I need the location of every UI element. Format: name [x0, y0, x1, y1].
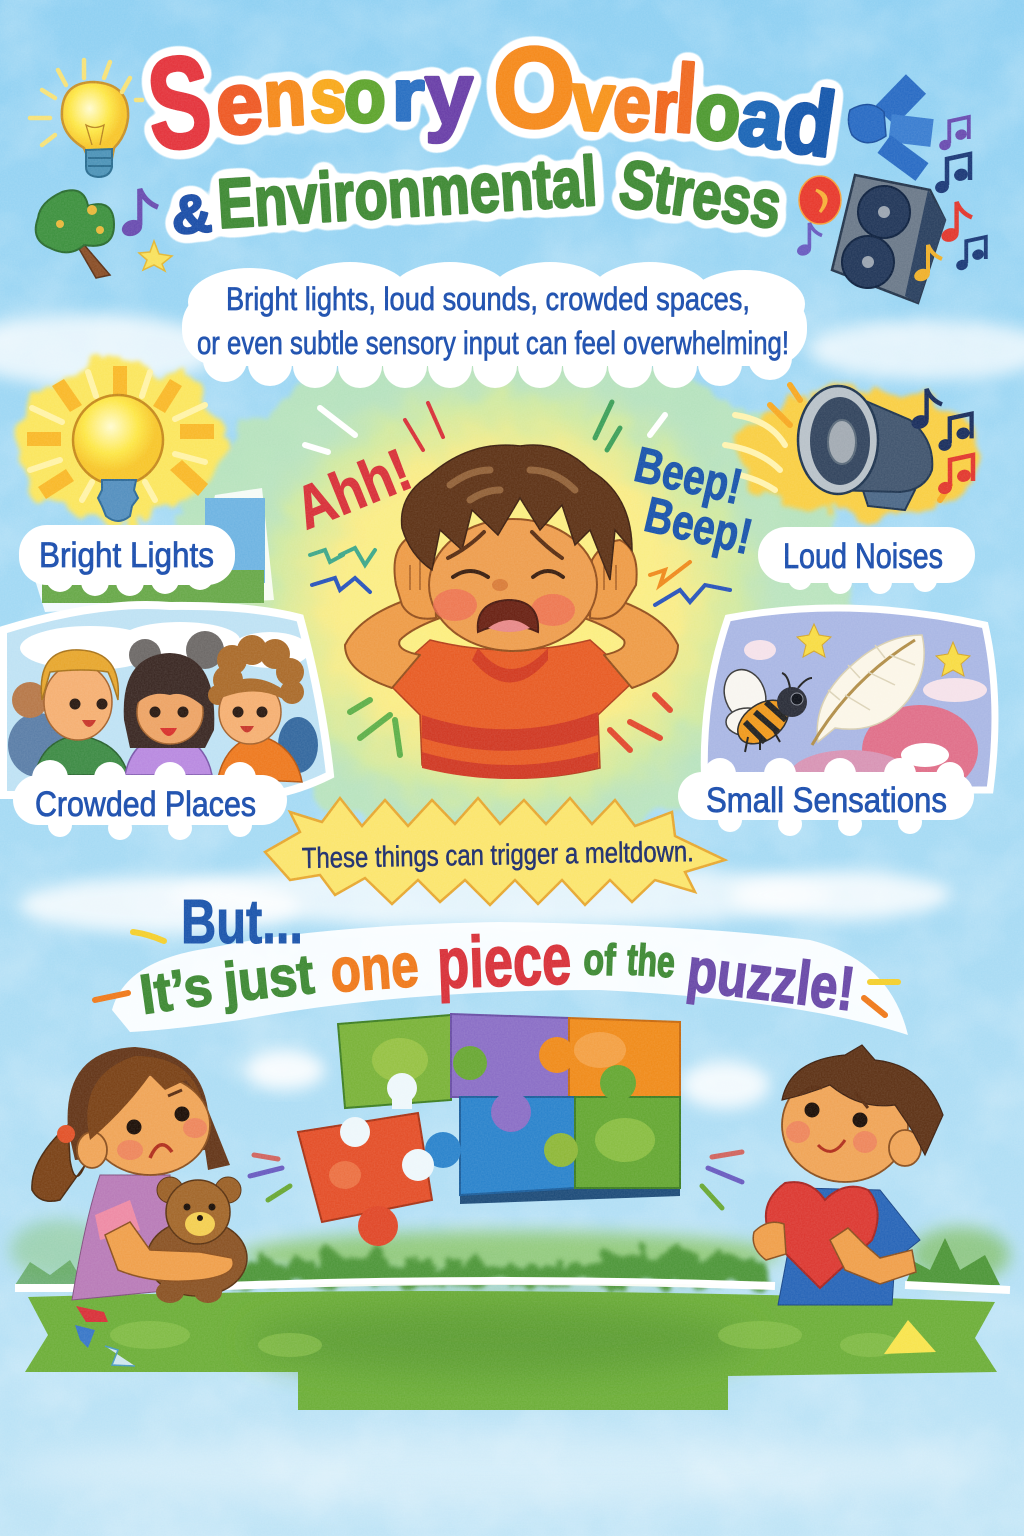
- white ribbon: [112, 922, 908, 1035]
- label: Small Sensations: [706, 781, 947, 820]
- heading: one piece of the puzzle: of: [583, 935, 617, 985]
- stars: [797, 624, 831, 657]
- megaphone speaker: [798, 386, 932, 510]
- title line 1: Sensory Overload: O: [493, 24, 575, 152]
- title line 1: Sensory Overload: o: [691, 63, 746, 159]
- hair highlights: [450, 470, 575, 500]
- title line 1: Sensory Overload: e: [611, 58, 654, 149]
- label: Bright Lights: [39, 536, 214, 575]
- hair tie: [57, 1125, 75, 1143]
- panel: crowded places: [3, 605, 330, 840]
- glow: [735, 388, 985, 516]
- piece: blue: [425, 1092, 575, 1195]
- heart: [766, 1182, 878, 1288]
- icon: star: [139, 241, 172, 271]
- title line 1: Sensory Overload: e: [212, 53, 266, 154]
- title line 2: & Environmental Stress: Environmental: [215, 142, 599, 243]
- piece: orange: [539, 1018, 680, 1097]
- frame: [3, 605, 330, 795]
- fringe: [87, 1056, 202, 1140]
- hands: [753, 1222, 916, 1284]
- tab: green into purple: [453, 1046, 487, 1080]
- Beep! Beep!: Beep!: [640, 486, 757, 565]
- panel: loud noises: [725, 385, 985, 594]
- intro text: [197, 281, 789, 361]
- title line 2: & Environmental Stress: Stress: [615, 146, 786, 243]
- notes: [909, 389, 973, 496]
- heading: one piece of the puzzle: just: [220, 942, 317, 1014]
- piece: green top-left: [338, 1015, 451, 1109]
- shadow: [460, 1110, 680, 1204]
- icon: tree: [36, 190, 114, 278]
- icon: blue spotlight: [848, 84, 932, 172]
- center glow: [160, 340, 850, 840]
- title line 1: Sensory Overload: d: [777, 68, 842, 177]
- sun rays: [27, 366, 214, 499]
- ear: [889, 1130, 921, 1166]
- label: Crowded Places: [35, 785, 256, 824]
- intro cloud: [182, 262, 807, 388]
- Ahh!: Ahh!: [286, 436, 420, 542]
- building and lawn: [35, 488, 274, 612]
- title line 1: Sensory Overload: [142, 24, 842, 179]
- pigtail: [32, 1125, 85, 1201]
- title line 1: Sensory Overload: v: [569, 54, 617, 150]
- title line 1: Sensory Overload: l: [672, 45, 700, 153]
- head: [782, 1068, 908, 1182]
- bushes: [10, 1220, 1010, 1285]
- shirt: [778, 1188, 920, 1305]
- face: [429, 519, 597, 651]
- piece: green bottom-right: [544, 1065, 680, 1188]
- label: [19, 525, 235, 596]
- arms: [345, 538, 678, 688]
- background clouds: [0, 314, 1024, 1506]
- right boy: [753, 1045, 943, 1305]
- title line 1: Sensory Overload: r: [651, 65, 680, 149]
- panel: bright lights: [13, 364, 274, 612]
- title line 1: Sensory Overload: S: [142, 28, 217, 179]
- title line 1: Sensory Overload: a: [734, 70, 790, 166]
- title line 1: Sensory Overload: s: [310, 54, 346, 139]
- clouds in frame: [20, 622, 310, 670]
- icon: red button: [799, 176, 841, 224]
- heading: but: [133, 888, 303, 957]
- expression: [117, 1090, 207, 1160]
- kid: blonde: [12, 650, 128, 775]
- label: [758, 527, 975, 594]
- face: [90, 1075, 210, 1175]
- bee: [717, 664, 812, 753]
- motion dashes: [250, 1152, 742, 1208]
- grass banner: [25, 1291, 997, 1410]
- teddy: [147, 1177, 247, 1303]
- toys: [75, 1306, 135, 1366]
- expression: [433, 532, 575, 632]
- hair: [782, 1045, 943, 1155]
- title: [142, 24, 842, 246]
- white stripe: [15, 1281, 1010, 1290]
- hair: [402, 445, 632, 580]
- icons: music notes: [795, 117, 986, 283]
- piece: purple: [451, 1014, 569, 1097]
- label: Loud Noises: [783, 537, 943, 576]
- hair back: [68, 1047, 230, 1170]
- callout text: These things can trigger a meltdown.: [302, 836, 694, 875]
- kid: dark hair: [124, 653, 214, 775]
- icon: purple music note: [120, 189, 158, 239]
- action lines: [305, 402, 730, 755]
- yellow shard: [884, 1320, 936, 1354]
- title line 2: & Environmental Stress: &: [170, 183, 214, 246]
- shirt: [385, 640, 635, 779]
- icon: light bulb small: [30, 60, 142, 177]
- central boy: [286, 402, 757, 779]
- background crowd: [8, 631, 318, 777]
- heading: one piece of the puzzle: piece: [436, 919, 572, 1004]
- Beep! Beep!: Beep!: [630, 436, 747, 515]
- dress: [72, 1175, 175, 1300]
- heading: one piece of the puzzle: puzzle!: [683, 935, 858, 1024]
- label: [13, 760, 287, 840]
- puzzle: [250, 1014, 742, 1246]
- title line 1: Sensory Overload: n: [261, 51, 308, 143]
- heading: one piece of the puzzle: It’s: [136, 953, 216, 1026]
- heading: one piece of the puzzle: one: [328, 931, 421, 1006]
- panel: small sensations: [678, 608, 995, 836]
- bulb: [73, 395, 163, 485]
- heading: one piece of the puzzle: [136, 919, 858, 1026]
- kid: curly hair: [208, 635, 304, 782]
- girl: [32, 1047, 247, 1303]
- callout: starburst: [265, 798, 725, 905]
- title line 1: Sensory Overload: o: [344, 55, 386, 139]
- title line 1: Sensory Overload: y: [425, 45, 473, 143]
- feather: [812, 635, 924, 745]
- piece: red: [298, 1113, 434, 1246]
- intro text: or even subtle sensory input can feel overwhelming!: [197, 325, 789, 361]
- intro text: Bright lights, loud sounds, crowded spaces,: [226, 281, 750, 317]
- arm: [105, 1222, 233, 1281]
- frame: [704, 608, 995, 790]
- heading: but: But...: [181, 888, 303, 957]
- ear: [77, 1132, 107, 1168]
- icon: loudspeaker box: [832, 175, 946, 303]
- decorative dashes: [95, 982, 898, 1015]
- pink hills: [744, 640, 987, 800]
- heading: one piece of the puzzle: the: [625, 935, 677, 987]
- title line 1: Sensory Overload: r: [392, 56, 424, 136]
- sun glow: [13, 364, 223, 520]
- grass blotches: [110, 1321, 900, 1357]
- sound rays: [725, 415, 785, 490]
- cloud shape: [182, 262, 807, 388]
- Beep! Beep!: [630, 436, 757, 565]
- expression: [786, 1087, 877, 1153]
- label: [678, 758, 974, 836]
